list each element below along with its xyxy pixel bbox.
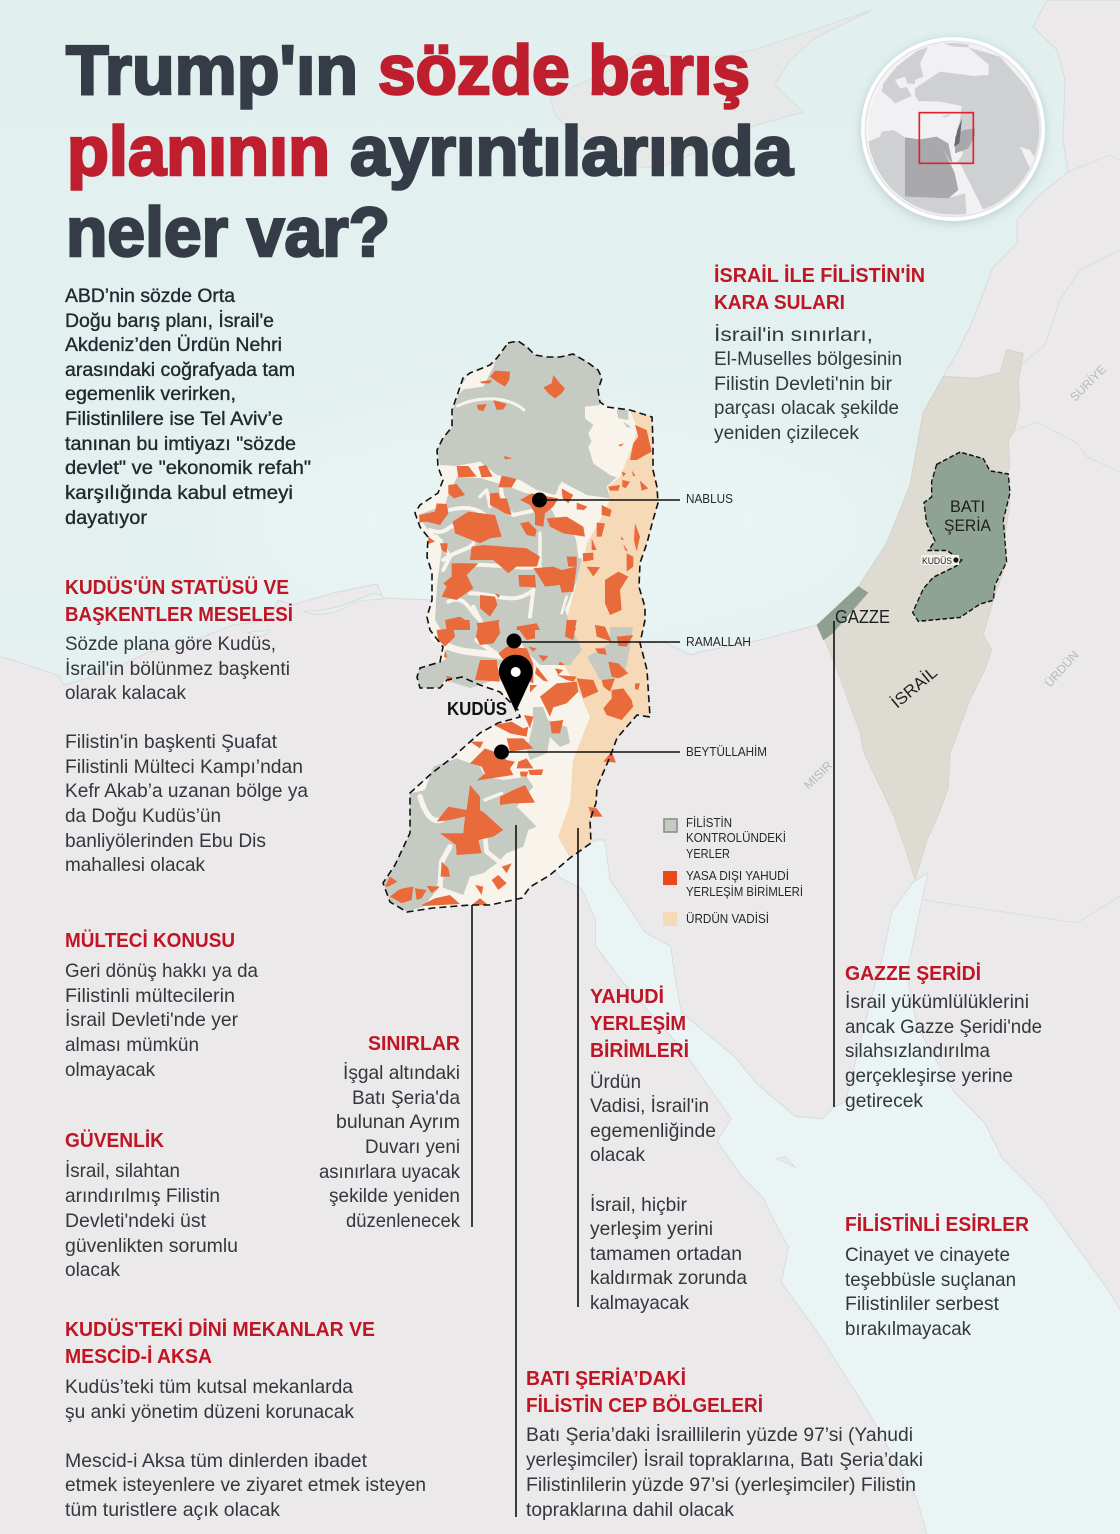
body text: parçası olacak şekilde — [714, 397, 899, 419]
globe: Middle East land — [915, 47, 1047, 210]
body text: mahallesi olacak — [65, 854, 205, 876]
panel: country map of Israel, Gaza and West Bank — [801, 350, 1109, 880]
globe: Aegean islands cut — [895, 77, 908, 88]
body text — [65, 1376, 426, 1521]
body text: yerleşim yerini — [590, 1218, 713, 1240]
globe: red locator frame — [919, 113, 973, 163]
country borders — [923, 155, 1120, 923]
intro text — [65, 285, 311, 529]
legend item: Palestinian-controlled — [664, 816, 786, 861]
body text: bulunan Ayrım — [336, 1111, 460, 1133]
body text: tamamen ortadan — [590, 1243, 742, 1265]
body text: getirecek — [845, 1090, 923, 1112]
legend item: Palestinian-controlled: YERLER — [686, 847, 730, 861]
city marker: Ramallah: RAMALLAH — [686, 635, 751, 649]
panel: settlements — [590, 985, 747, 1314]
globe: Balkans — [882, 47, 928, 103]
body text: Devleti'ndeki üst — [65, 1210, 207, 1232]
globe: north shore of Black Sea — [930, 43, 969, 48]
heading: YERLEŞİM — [590, 1012, 686, 1035]
body text: olmayacak — [65, 1059, 155, 1081]
body text: gerçekleşirse yerine — [845, 1065, 1013, 1087]
body text — [845, 990, 1042, 1112]
body text: topraklarına dahil olacak — [526, 1499, 734, 1521]
body text: Filistinliler serbest — [845, 1293, 1000, 1315]
title: neler var? — [66, 193, 390, 271]
body text: Vadisi, İsrail'in — [590, 1094, 709, 1117]
heading — [65, 1318, 375, 1368]
legend item: settlements: YASA DIŞI YAHUDİ — [686, 869, 789, 883]
globe: Libya and Sudan — [868, 130, 967, 215]
label: MISIR: MISIR — [801, 758, 835, 792]
city marker: Beytüllahim: BEYTÜLLAHİM — [686, 745, 767, 759]
legend item: settlements: YERLEŞİM BİRİMLERİ — [686, 885, 803, 899]
heading: KUDÜS'ÜN STATÜSÜ VE — [65, 576, 289, 599]
sea: Red Sea and gulfs — [553, 840, 1120, 1534]
heading: MÜLTECİ KONUSU — [65, 929, 235, 952]
body text: Filistinli Mülteci Kampı’ndan — [65, 756, 303, 778]
panel: Gaza Strip — [845, 962, 1042, 1112]
heading — [65, 576, 293, 626]
body text: İsrail, silahtan — [65, 1159, 180, 1182]
intro text: devlet" ve "ekonomik refah" — [65, 457, 311, 479]
map border: dashed West Bank outline — [383, 341, 658, 912]
intro text: arasındaki coğrafyada tam — [65, 359, 295, 381]
lagoons on the Mediterranean coast — [248, 594, 384, 636]
body text: İsrail'in sınırları, — [714, 323, 873, 346]
intro text: tanınan bu imtiyazı "sözde — [65, 433, 296, 455]
body text: İsrail yükümlülüklerini — [845, 990, 1029, 1013]
body text: Batı Şeria’daki İsraillilerin yüzde 97’si (Yahudi — [526, 1423, 913, 1446]
map detail: illegal settlements north — [419, 371, 652, 630]
body text: Geri dönüş hakkı ya da — [65, 960, 258, 982]
body text: Ürdün — [590, 1071, 641, 1093]
body text: Cinayet ve cinayete — [845, 1244, 1010, 1266]
area: Gaza — [817, 586, 868, 640]
panel: Israel and Palestine territorial waters — [714, 264, 925, 444]
body text: yerleşimciler) İsrail topraklarına, Batı Şeria’daki — [526, 1448, 923, 1471]
body text: Mescid-i Aksa tüm dinlerden ibadet — [65, 1450, 368, 1472]
legend item: Palestinian-controlled: KONTROLÜNDEKİ — [686, 831, 786, 845]
body text: banliyölerinden Ebu Dis — [65, 830, 266, 852]
city marker: Ramallah — [506, 634, 751, 649]
title: planının — [67, 112, 330, 190]
title: sözde barış — [378, 31, 750, 109]
body text — [845, 1244, 1016, 1340]
label: BATI ŞERİA — [944, 497, 992, 535]
heading: FİLİSTİN CEP BÖLGELERİ — [526, 1394, 763, 1417]
legend — [663, 816, 803, 926]
heading: MESCİD-İ AKSA — [65, 1345, 212, 1368]
body text: asınırlara uyacak — [319, 1161, 460, 1183]
body text: ancak Gazze Şeridi'nde — [845, 1016, 1042, 1038]
label: BATI ŞERİA: ŞERİA — [944, 516, 992, 535]
globe: Red Sea — [943, 149, 983, 209]
body text: Filistinli mültecilerin — [65, 985, 235, 1007]
body text: arındırılmış Filistin — [65, 1185, 220, 1207]
globe: Persian Gulf — [1020, 146, 1034, 168]
heading: KARA SULARI — [714, 291, 845, 314]
background: light sea patch — [230, 400, 890, 640]
body text: İsrail Devleti'nde yer — [65, 1008, 238, 1031]
city marker: Nablus — [532, 492, 733, 508]
body text: da Doğu Kudüs’ün — [65, 805, 221, 827]
body text: Batı Şeria'da — [352, 1087, 460, 1109]
area: West Bank — [913, 452, 1010, 621]
globe: Cyprus — [942, 113, 952, 117]
body text — [319, 1061, 460, 1232]
body text: Filistinlilerin yüzde 97’si (yerleşimciler) Filistin — [526, 1474, 916, 1496]
globe: Israel highlighted — [954, 118, 962, 147]
body text: şu anki yönetim düzeni korunacak — [65, 1401, 354, 1423]
callout lines from text to map — [472, 500, 834, 1517]
globe: Egypt highlighted — [905, 137, 958, 198]
panel: Kudüs status — [65, 576, 308, 876]
icon: Kudüs location pin — [499, 655, 533, 712]
body text: Filistin'in başkenti Şuafat — [65, 731, 278, 753]
inset globe locator — [861, 37, 1047, 223]
label: İSRAİL: İSRAİL — [887, 663, 941, 712]
intro text: egemenlik verirken, — [65, 383, 236, 405]
label: ÜRDÜN: ÜRDÜN — [1042, 648, 1082, 690]
panel: security — [65, 1129, 238, 1281]
body text: kaldırmak zorunda — [590, 1267, 747, 1289]
body text: İşgal altındaki — [343, 1061, 460, 1084]
intro text: Doğu barış planı, İsrail'e — [65, 309, 274, 332]
globe: Jordan highlighted — [955, 128, 975, 153]
heading: KUDÜS'TEKİ DİNİ MEKANLAR VE — [65, 1318, 375, 1341]
body text: etmek isteyenlere ve ziyaret etmek isteyen — [65, 1474, 426, 1496]
body text: Kudüs’teki tüm kutsal mekanlarda — [65, 1376, 353, 1398]
heading: FİLİSTİNLİ ESİRLER — [845, 1213, 1029, 1236]
heading — [590, 985, 689, 1062]
body text: silahsızlandırılma — [845, 1040, 990, 1062]
heading: GAZZE ŞERİDİ — [845, 962, 981, 985]
label: GAZZE: GAZZE — [835, 607, 890, 627]
area: Israel — [817, 350, 1023, 880]
land: Cyprus — [550, 10, 872, 168]
body text: Duvarı yeni — [365, 1136, 460, 1158]
legend item: Palestinian-controlled: FİLİSTİN — [686, 816, 732, 830]
body text — [714, 323, 902, 444]
body text: Sözde plana göre Kudüs, — [65, 633, 276, 655]
title: Trump'ın — [66, 31, 358, 109]
map base: West Bank territory — [383, 341, 658, 912]
heading: BAŞKENTLER MESELESİ — [65, 603, 293, 626]
city marker: Nablus: NABLUS — [686, 492, 733, 506]
body text — [65, 633, 308, 876]
body text: El-Muselles bölgesinin — [714, 348, 902, 370]
heading: İSRAİL İLE FİLİSTİN'İN — [714, 264, 925, 287]
map area: Jordan Valley — [555, 410, 658, 858]
body text — [65, 960, 258, 1081]
title — [66, 31, 794, 271]
body text: olarak kalacak — [65, 682, 186, 704]
panel: borders — [319, 1032, 460, 1232]
heading: GÜVENLİK — [65, 1129, 164, 1152]
label: SURİYE: SURİYE — [1067, 362, 1109, 404]
city marker: Beytüllahim — [494, 744, 767, 760]
body text: güvenlikten sorumlu — [65, 1235, 238, 1257]
body text: Kefr Akab’a uzanan bölge ya — [65, 780, 308, 802]
body text: egemenliğinde — [590, 1120, 716, 1142]
panel: Palestinian enclaves — [526, 1367, 923, 1521]
heading — [714, 264, 925, 314]
panel: Palestinian prisoners — [845, 1213, 1029, 1340]
panel: detailed West Bank map — [383, 341, 658, 912]
heading: YAHUDİ — [590, 985, 664, 1008]
body text: İsrail, hiçbir — [590, 1193, 687, 1216]
body text — [65, 1159, 238, 1281]
body text — [590, 1071, 747, 1314]
intro text: Filistinlilere ise Tel Aviv’e — [65, 408, 283, 430]
intro text: ABD’nin sözde Orta — [65, 285, 235, 307]
body text: Filistin Devleti'nin bir — [714, 373, 893, 395]
body text: teşebbüsle suçlanan — [845, 1269, 1016, 1291]
body text: olacak — [590, 1144, 645, 1166]
body text: alması mümkün — [65, 1034, 199, 1056]
panel: holy sites — [65, 1318, 426, 1521]
heading: BATI ŞERİA’DAKİ — [526, 1367, 686, 1390]
legend item: settlements — [663, 869, 803, 899]
map detail: cream roads and corridors — [420, 363, 583, 887]
legend item: Jordan Valley: ÜRDÜN VADİSİ — [686, 912, 769, 926]
label: BATI ŞERİA: BATI — [950, 497, 985, 516]
map areas: Palestinian-controlled land — [383, 341, 633, 912]
heading: BİRİMLERİ — [590, 1039, 689, 1062]
intro text: karşılığında kabul etmeyi — [65, 482, 293, 504]
intro text: dayatıyor — [65, 507, 148, 529]
panel: refugees — [65, 929, 258, 1081]
heading: SINIRLAR — [368, 1032, 460, 1055]
title: ayrıntılarında — [350, 112, 794, 190]
body text: İsrail'in bölünmez başkenti — [65, 657, 290, 680]
intro text: Akdeniz’den Ürdün Nehri — [65, 334, 282, 356]
body text — [526, 1423, 923, 1521]
heading — [526, 1367, 763, 1417]
body text: düzenlenecek — [346, 1210, 460, 1232]
label: KUDÜS small: KUDÜS — [922, 556, 952, 567]
body text: kalmayacak — [590, 1292, 689, 1314]
map detail: illegal settlements south — [385, 620, 640, 906]
body text: şekilde yeniden — [329, 1185, 460, 1207]
body text: tüm turistlere açık olacak — [65, 1499, 280, 1521]
label: KUDÜS: KUDÜS — [447, 698, 507, 719]
body text: yeniden çizilecek — [714, 422, 859, 444]
body text: olacak — [65, 1259, 120, 1281]
body text: bırakılmayacak — [845, 1318, 971, 1340]
